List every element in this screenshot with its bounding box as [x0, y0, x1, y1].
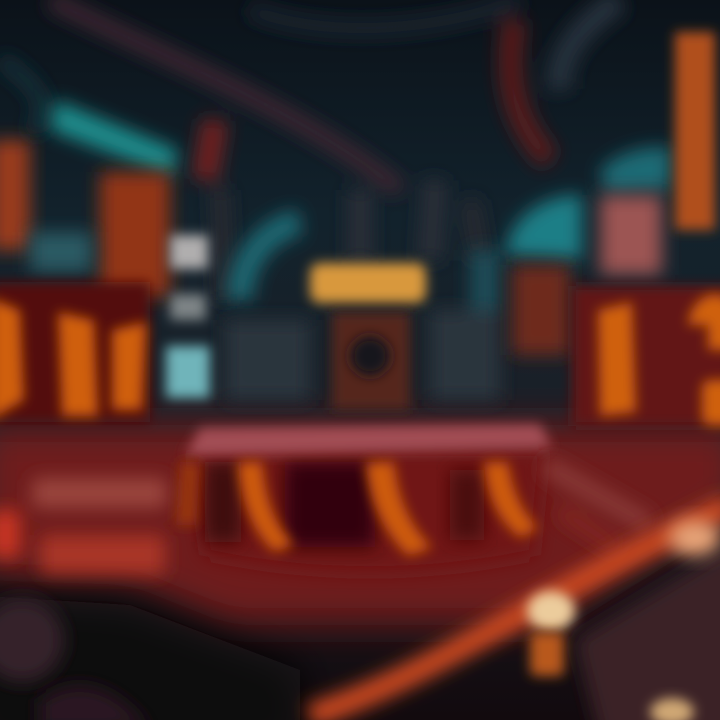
- orange diagonal walkway: [310, 505, 720, 716]
- pale platform top: [185, 424, 552, 456]
- drum orange stripes: [176, 462, 538, 556]
- orange far-left column: [0, 140, 30, 250]
- background: overhead beams: [0, 0, 620, 300]
- speaker cone: [350, 336, 390, 376]
- panel: right floor strips: [545, 465, 650, 550]
- pink panel: [600, 195, 662, 275]
- cream lamp bottom: [650, 698, 694, 720]
- floor: red stage floor: [0, 425, 720, 625]
- teal arch: [505, 195, 582, 260]
- dark drum segment left: [205, 462, 241, 542]
- yellow sign bar: [310, 263, 426, 303]
- panel: right column group: [505, 32, 720, 426]
- dark red block: [0, 282, 150, 422]
- orange lamp base: [530, 632, 564, 676]
- teal patch: [30, 232, 92, 272]
- peach light: [669, 520, 720, 556]
- mid muted machinery: [225, 250, 500, 400]
- bottom left shadow: [0, 595, 300, 720]
- teal curved shape: [240, 222, 300, 300]
- panel: pale light blocks: [166, 235, 210, 398]
- panel: central drum platform: [176, 424, 552, 572]
- mauve blob: [0, 598, 64, 682]
- teal cap: [600, 147, 672, 192]
- panel: left column group: [0, 100, 178, 422]
- panel: left floor strips: [0, 478, 167, 575]
- mauve lower shape: [40, 686, 150, 720]
- dark drum segment: [285, 462, 375, 547]
- glowing letter strokes: [0, 298, 146, 420]
- dark drum segment right: [450, 470, 484, 540]
- brown column: [512, 265, 570, 355]
- teal slanted bar: [50, 100, 178, 176]
- cream lamp: [527, 591, 575, 631]
- orange tall column: [675, 32, 715, 230]
- drum body: [190, 450, 545, 572]
- bottom right dark mass: [575, 540, 720, 720]
- orange column: [100, 172, 170, 297]
- dark red block: [572, 286, 720, 426]
- brown speaker box: [332, 312, 410, 410]
- panel: central sign and speaker: [310, 263, 426, 410]
- glowing digit strokes: [598, 294, 720, 425]
